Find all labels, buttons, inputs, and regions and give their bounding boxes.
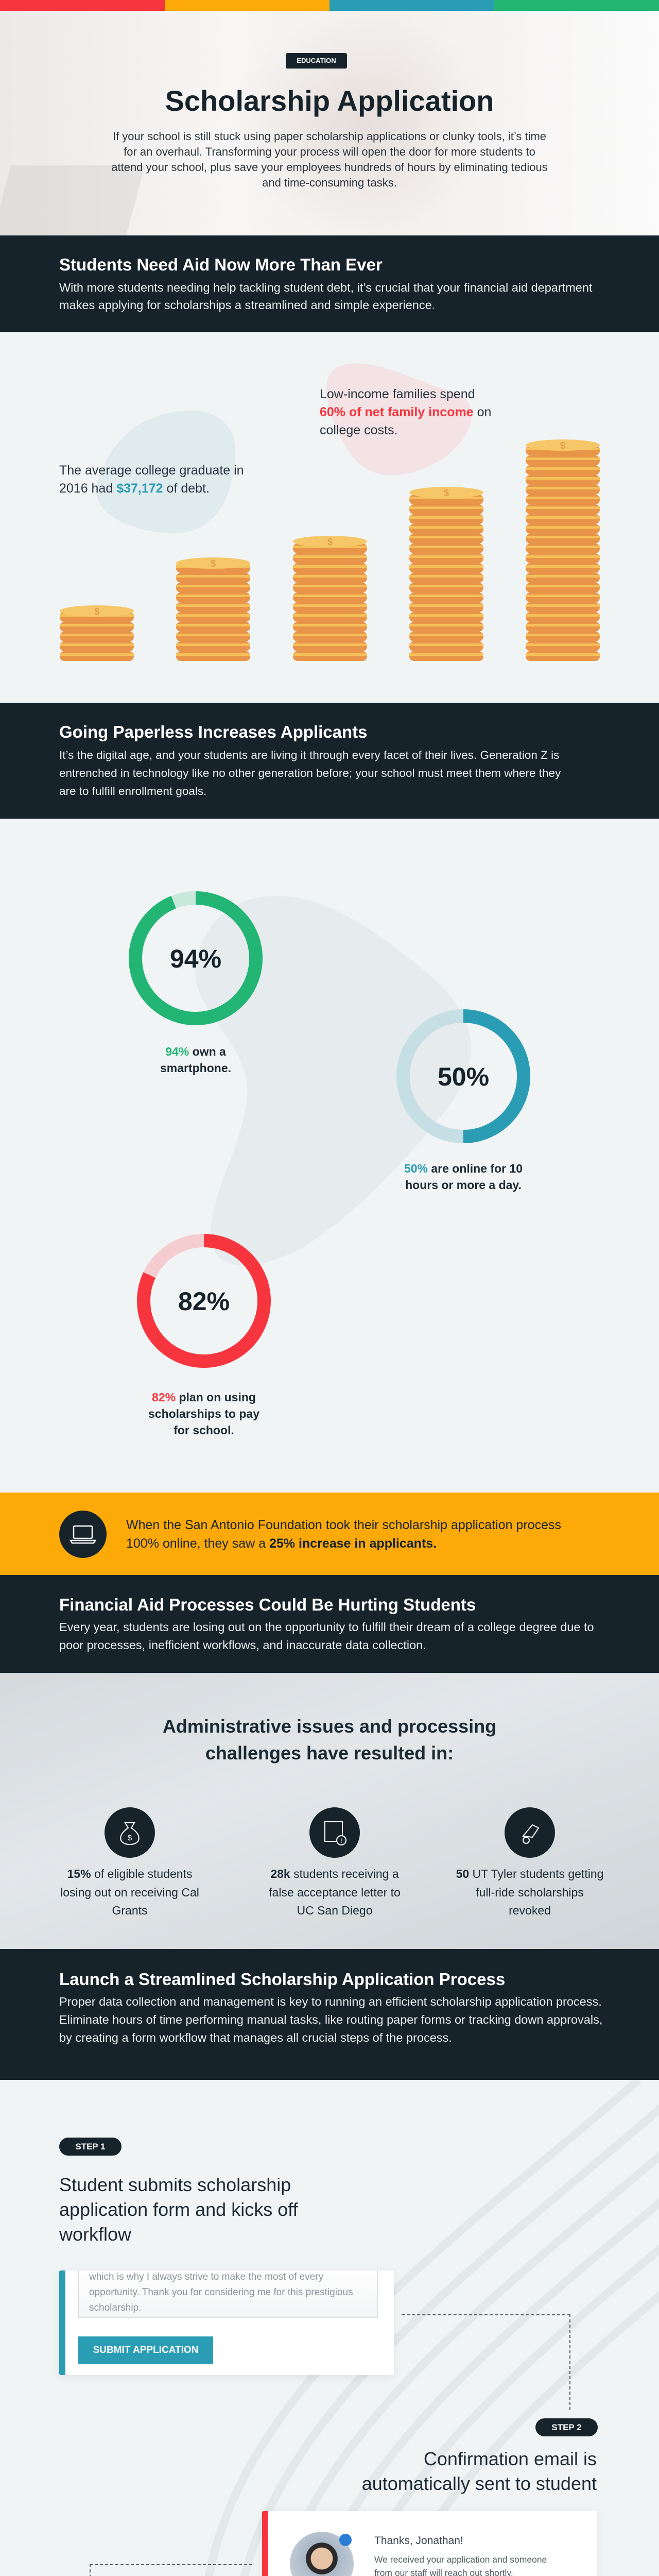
panel: administrative issues bbox=[0, 1673, 659, 1949]
ring 94%: 94% own a bbox=[165, 1045, 226, 1058]
step 2: STEP 2 bbox=[551, 2422, 582, 2432]
hero panel bbox=[0, 11, 659, 235]
stat: false acceptance: ! bbox=[340, 1837, 342, 1844]
stat: revoked bbox=[456, 1807, 603, 1917]
section band: students need aid: With more students needing help tackling student debt, it’s crucial that your financial aid department makes applying for scholarships a streamlined and simple experience. bbox=[59, 281, 592, 312]
ring 50% bbox=[396, 1009, 530, 1192]
stat: false acceptance: 28k students receiving a false acceptance letter to UC San Diego bbox=[269, 1867, 401, 1917]
education tag: EDUCATION bbox=[297, 57, 336, 64]
coins chart background blobs bbox=[96, 364, 472, 533]
ring 50%: hours or more a day. bbox=[405, 1178, 522, 1192]
section band: going paperless: It’s the digital age, and your students are living it through every facet of their lives. Generation Z is entrenched in technology like no other generation before; your school must meet them where they are to fulfill enrollment goals. bbox=[59, 749, 561, 798]
avatar bbox=[290, 2532, 354, 2576]
section band: launch process bbox=[0, 1949, 659, 2080]
card: application form bbox=[59, 2270, 394, 2375]
step 1: STEP 1 bbox=[75, 2142, 106, 2151]
panel: administrative issues: Administrative issues and processing bbox=[163, 1716, 496, 1737]
top color bar bbox=[0, 0, 659, 11]
card: application form: which is why I always strive to make the most of every opportunity. Thank you for considering me for this prestigious scholarship. bbox=[89, 2272, 353, 2313]
ring 50%: 50% are online for 10 bbox=[404, 1162, 523, 1175]
callout: san antonio: When the San Antonio Foundation took their scholarship application process 100% online, they saw a 25% increase in applicants. bbox=[126, 1518, 561, 1551]
stat: average debt: The average college graduate in 2016 had $37,172 of debt. bbox=[59, 463, 244, 496]
step 2 bbox=[262, 2418, 598, 2576]
stat: false acceptance bbox=[269, 1807, 401, 1917]
ring 82%: 82% plan on using bbox=[152, 1391, 256, 1404]
step 1 bbox=[59, 2138, 394, 2377]
arrow: dashed 1 to 2 bbox=[402, 2314, 570, 2410]
section band: launch process: Launch a Streamlined Scholarship Application Process bbox=[59, 1970, 505, 1989]
ring 82%: for school. bbox=[174, 1423, 234, 1437]
title: Scholarship Application bbox=[165, 84, 494, 117]
card: confirmation email: Thanks, Jonathan! bbox=[374, 2535, 463, 2547]
ring 94%: 94% bbox=[170, 944, 221, 973]
ring 94% bbox=[129, 891, 263, 1075]
ring 82% bbox=[137, 1234, 271, 1437]
section band: going paperless: Going Paperless Increases Applicants bbox=[59, 722, 368, 741]
ring 50%: 50% bbox=[438, 1062, 489, 1091]
stat: cal grants: 15% of eligible students losing out on receiving Cal Grants bbox=[60, 1867, 199, 1917]
ring 82%: 82% bbox=[178, 1287, 230, 1316]
education tag bbox=[286, 53, 347, 69]
ring 82%: scholarships to pay bbox=[148, 1407, 259, 1420]
stat: cal grants bbox=[60, 1807, 199, 1917]
coin stacks bbox=[60, 439, 600, 661]
section band: students need aid bbox=[0, 235, 659, 332]
icon: laptop bbox=[59, 1511, 107, 1558]
background blob paperless bbox=[196, 896, 471, 1265]
stat: low-income: Low-income families spend 60% of net family income on college costs. bbox=[320, 387, 491, 437]
arrow: dashed 2 to 3 bbox=[90, 2564, 252, 2576]
panel: administrative issues: challenges have resulted in: bbox=[205, 1742, 454, 1764]
card: confirmation email bbox=[262, 2511, 597, 2576]
intro text: If your school is still stuck using paper scholarship applications or clunky tools, it’s time for an overhaul. Transforming your process will open the door for more students to attend your school, plus save your employees hundreds of hours by eliminating tedious and time-consuming tasks. bbox=[111, 130, 548, 189]
callout: san antonio bbox=[0, 1493, 659, 1575]
step 2: Confirmation email is automatically sent to student bbox=[362, 2448, 597, 2494]
stat: cal grants: $ bbox=[128, 1834, 132, 1842]
section band: financial aid: Every year, students are losing out on the opportunity to fulfill their dream of a college degree due to poor processes, inefficient workflows, and inaccurate data collection. bbox=[59, 1620, 594, 1652]
stat: revoked: 50 UT Tyler students getting full-ride scholarships revoked bbox=[456, 1867, 603, 1917]
section band: financial aid bbox=[0, 1575, 659, 1673]
card: application form: SUBMIT APPLICATION bbox=[93, 2345, 198, 2355]
wavy background bbox=[205, 2080, 659, 2576]
section band: launch process: Proper data collection and management is key to running an efficient scholarship application process. Eliminate hours of time performing manual tasks, like routing paper forms or tracking down approvals, by creating a form workflow that manages all crucial steps of the process. bbox=[59, 1995, 602, 2044]
section band: financial aid: Financial Aid Processes Could Be Hurting Students bbox=[59, 1595, 476, 1614]
section band: going paperless bbox=[0, 703, 659, 819]
step 1: Student submits scholarship application form and kicks off workflow bbox=[59, 2174, 298, 2245]
section band: students need aid: Students Need Aid Now More Than Ever bbox=[59, 255, 383, 274]
ring 94%: smartphone. bbox=[160, 1061, 231, 1075]
